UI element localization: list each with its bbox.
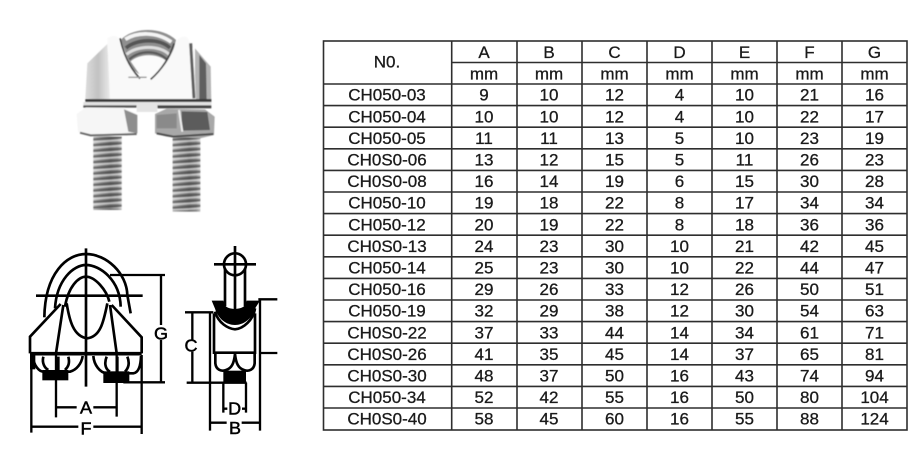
table row CH050-03: 12 [605,86,624,105]
table row CH050-34: 52 [475,388,493,407]
dimension label A: A [80,397,92,417]
table row CH050-16: 26 [540,280,558,299]
table row CH050-14: CH050-14 [348,259,426,278]
table row CH050-04 [348,107,884,126]
table row CH0S0-30: 16 [670,367,689,386]
table row CH050-10: 8 [675,194,684,213]
table row CH0S0-40: CH0S0-40 [347,410,427,429]
table row CH050-12: 22 [605,215,624,234]
table row CH0S0-30: 50 [605,367,624,386]
table row CH0S0-30: 43 [735,367,754,386]
table row CH0S0-26 [347,345,884,364]
table row CH0S0-06: 15 [605,151,624,170]
table row CH0S0-26: 65 [800,345,819,364]
table row CH0S0-22: 44 [605,323,624,342]
table row CH0S0-30: 48 [475,367,493,386]
table row CH050-34: 42 [540,388,558,407]
table row CH0S0-08: 6 [675,172,684,191]
table row CH050-10 [348,194,884,213]
table header: units: mm [600,64,629,84]
table row CH050-16: 33 [605,280,624,299]
dimension label D: D [228,398,241,418]
table row CH050-12: 20 [475,215,493,234]
table header: units: mm [730,64,759,84]
table row CH050-34: 80 [800,388,819,407]
table row CH0S0-08: 28 [865,172,884,191]
table row CH050-05 [348,129,884,148]
table row CH050-03: CH050-03 [348,86,426,105]
table row CH050-19 [348,302,884,321]
photo: stainless steel wire rope clip [77,30,215,212]
dimension label F: F [80,418,91,438]
table row CH0S0-40: 58 [475,410,493,429]
dimension label B: B [229,418,241,438]
table row CH0S0-08: 19 [605,172,624,191]
table row CH0S0-06: 11 [736,151,753,170]
table row CH0S0-22 [347,323,884,342]
table header: units: mm [795,64,824,84]
table row CH050-10: 22 [605,194,624,213]
table row CH0S0-13: 24 [475,237,493,256]
table row CH0S0-06: 13 [475,151,493,170]
table header: units: mm [470,64,498,84]
table row CH050-34: 16 [670,388,689,407]
table row CH050-05: 11 [540,129,558,148]
table row CH0S0-40: 60 [605,410,624,429]
table row CH050-19: 30 [735,302,754,321]
side view saddle [212,301,260,325]
table row CH050-04: 4 [675,107,684,126]
side view outline [214,246,256,371]
table row CH050-03: 4 [675,86,684,105]
table row CH0S0-06: 12 [540,151,558,170]
dimension lines B, C, D [185,299,277,431]
table row CH050-16: 51 [865,280,884,299]
table row CH0S0-06: 23 [865,151,884,170]
table row CH050-04: 12 [605,107,624,126]
table row CH050-12: 19 [540,215,558,234]
table row CH0S0-22: 14 [670,323,689,342]
right wing of saddle [195,48,211,103]
table row CH050-05: CH050-05 [348,129,426,148]
table row CH0S0-13: 30 [605,237,624,256]
front view nuts [42,370,129,383]
table row CH050-04: 17 [865,107,884,126]
table row CH050-14: 25 [475,259,493,278]
table row CH050-19: 32 [475,302,493,321]
table header: units [470,64,889,84]
front view outline [30,248,143,387]
specification table [324,41,907,430]
table row CH0S0-40: 124 [860,410,889,429]
table row CH0S0-26: CH0S0-26 [347,345,427,364]
table row CH0S0-22: 34 [735,323,754,342]
table row CH050-03 [348,86,884,105]
table row CH0S0-40: 55 [735,410,754,429]
table row CH050-14: 22 [735,259,754,278]
table row CH050-04: 10 [735,107,754,126]
technical drawing: front view with dimensions A, F, G [30,248,168,438]
table row CH050-10: CH050-10 [348,194,426,213]
table row CH050-14: 23 [540,259,558,278]
table header: dimension letters: B [543,43,555,62]
table row CH0S0-22: 61 [800,323,819,342]
U-bolt top [121,30,176,77]
table row CH0S0-13: CH0S0-13 [347,237,427,256]
table row CH050-12: 18 [735,215,754,234]
table row CH0S0-13: 21 [735,237,754,256]
table row CH050-05: 13 [605,129,624,148]
left wing of saddle [85,44,111,100]
table row CH0S0-06 [347,150,884,170]
dimension lines A, F, G [31,275,165,434]
table row CH050-19: 38 [605,302,624,321]
table row CH0S0-13 [347,237,884,256]
table row CH050-10: 34 [865,194,884,213]
table row CH050-14: 47 [865,259,884,278]
table row CH0S0-30: 94 [865,367,884,386]
table row CH0S0-26: 45 [605,345,624,364]
table row CH050-12: 36 [865,215,884,234]
dimension label G: G [154,324,168,344]
technical drawing: side view with dimensions B, C, D [184,246,277,438]
table row CH0S0-30: CH0S0-30 [347,367,427,386]
base plate [85,99,211,102]
table row CH0S0-30: 74 [800,367,819,386]
table row CH0S0-13: 45 [865,237,884,256]
table row CH0S0-13: 10 [670,237,689,256]
table row CH050-03: 10 [735,86,754,105]
table row CH0S0-40 [347,410,889,429]
table header: number column: N0. [374,52,400,72]
table row CH0S0-13: 42 [800,237,819,256]
table row CH0S0-26: 81 [865,345,884,364]
table row CH0S0-26: 37 [735,345,754,364]
table row CH0S0-22: CH0S0-22 [347,323,427,342]
table row CH050-16 [348,280,884,299]
table row CH0S0-30: 37 [540,367,558,386]
table row CH0S0-40: 88 [800,410,819,429]
table row CH050-10: 34 [800,194,819,213]
table row CH050-19: 29 [540,302,558,321]
table row CH0S0-06: 5 [675,151,684,170]
table grid [324,41,907,430]
table row CH050-34: 104 [860,388,889,407]
table row CH0S0-08 [347,172,884,191]
table header: units: mm [535,64,563,84]
table row CH050-05: 23 [800,129,819,148]
side view nut [223,371,246,383]
table row CH050-14: 44 [800,259,819,278]
table row CH050-03: 16 [865,86,884,105]
table row CH050-12: 8 [675,215,684,234]
table row CH050-16: 12 [670,280,689,299]
table row CH0S0-08: 14 [540,172,558,191]
table row CH0S0-08: 16 [475,172,493,191]
table row CH0S0-22: 71 [865,323,884,342]
left bolt [93,133,122,210]
table row CH050-14: 30 [605,259,624,278]
table row CH050-05: 19 [865,129,884,148]
table row CH0S0-06: 26 [800,151,819,170]
table row CH050-04: 10 [475,107,493,126]
table row CH050-12: CH050-12 [348,215,426,234]
table row CH0S0-08: 30 [800,172,819,191]
right bolt [173,133,200,212]
right nut [155,109,215,138]
table row CH050-10: 17 [735,194,754,213]
table row CH050-05: 5 [675,129,684,148]
table row CH0S0-30 [347,366,884,386]
table row CH0S0-06: CH0S0-06 [347,151,427,170]
table row CH050-16: 26 [735,280,754,299]
table row CH050-34 [348,388,889,407]
table row CH050-16: 29 [475,280,493,299]
table row CH050-14 [348,258,884,278]
table row CH0S0-22: 33 [540,323,558,342]
dimension label C: C [184,336,197,356]
table row CH0S0-26: 14 [670,345,689,364]
table row CH050-19: 12 [670,302,689,321]
table row CH050-14: 10 [670,259,689,278]
table row CH050-03: 10 [540,86,558,105]
table row CH0S0-26: 41 [475,345,493,364]
table row CH050-16: 50 [800,280,819,299]
table row CH050-04: CH050-04 [348,107,426,126]
table row CH050-04: 10 [540,107,558,126]
table row CH050-03: 9 [479,86,489,105]
table row CH050-34: CH050-34 [348,388,426,407]
table row CH0S0-08: 15 [735,172,754,191]
table row CH050-19: 54 [800,302,819,321]
table row CH050-34: 50 [735,388,754,407]
table header: dimension letters: A [478,43,490,62]
table row CH050-12 [348,215,884,234]
table row CH050-19: CH050-19 [348,302,426,321]
table header: units: mm [665,64,694,84]
table header: dimension letters [478,43,881,62]
table row CH0S0-22: 37 [475,323,493,342]
table row CH050-34: 55 [605,388,624,407]
table row CH050-05: 11 [475,129,493,148]
table header: dimension letters: D [673,43,686,62]
table header: units: mm [860,64,889,84]
table row CH0S0-40: 16 [670,410,689,429]
table row CH0S0-26: 35 [540,345,558,364]
table row CH0S0-08: CH0S0-08 [347,172,427,191]
table row CH050-12: 36 [800,215,819,234]
saddle body [107,36,196,101]
table row CH050-03: 21 [800,86,819,105]
table row CH0S0-40: 45 [540,410,558,429]
table header: dimension letters: G [868,43,881,62]
left nut [77,107,137,137]
table row CH050-05: 10 [735,129,754,148]
table row CH050-04: 22 [800,107,819,126]
table row CH050-10: 18 [540,194,558,213]
table row CH0S0-13: 23 [540,237,558,256]
table row CH050-19: 63 [865,302,884,321]
table header: dimension letters: E [739,43,750,62]
table row CH050-16: CH050-16 [348,280,426,299]
table header: dimension letters: F [804,43,815,62]
table row CH050-10: 19 [475,194,493,213]
table header: dimension letters: C [608,43,621,62]
